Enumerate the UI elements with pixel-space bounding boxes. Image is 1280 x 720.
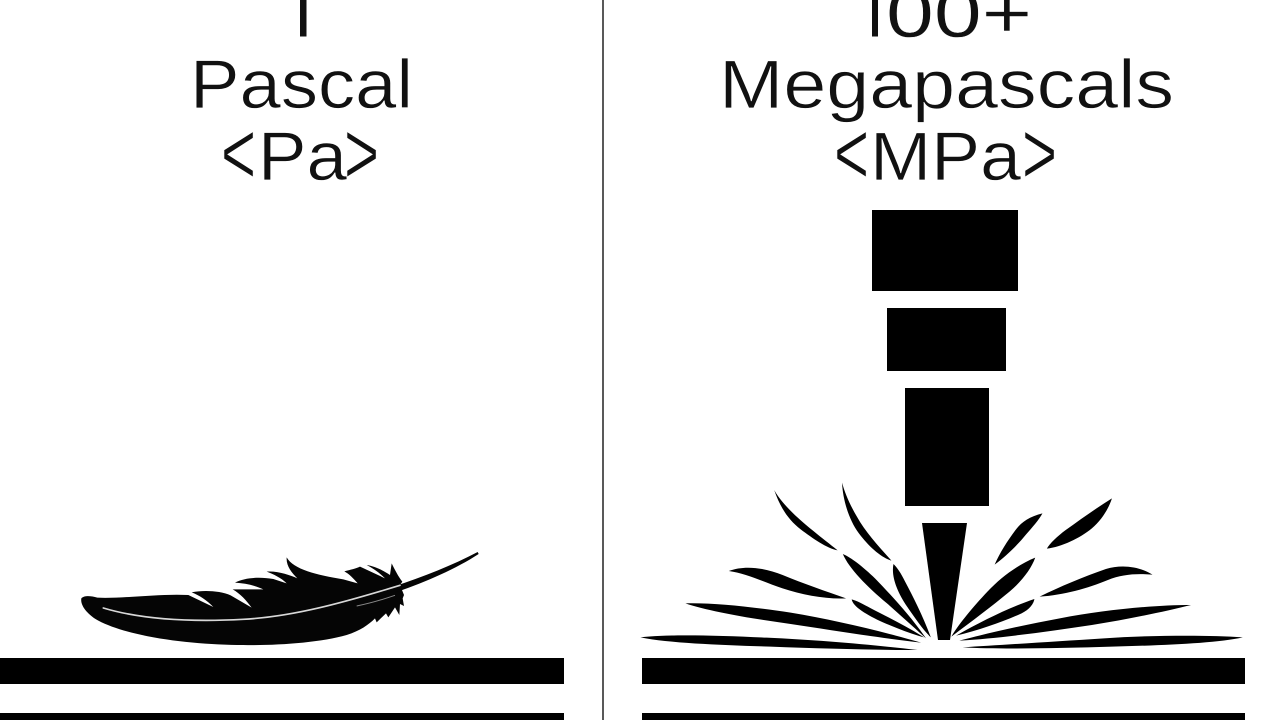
icon: impact shards	[640, 483, 1243, 650]
heading: 1 Pascal (Pa): Pa	[258, 118, 348, 195]
heading: 1 Pascal (Pa): Pascal	[190, 46, 413, 123]
heading: 1 Pascal (Pa): >	[344, 104, 379, 204]
heading: 100+ Megapascals (MPa): <	[834, 104, 869, 204]
ground bars: right	[642, 658, 1245, 720]
panel: one pascal	[0, 0, 564, 720]
icon: feather	[81, 552, 479, 645]
heading: 1 Pascal (Pa): <	[221, 104, 256, 204]
heading: 100+ Megapascals (MPa): >	[1022, 104, 1057, 204]
heading: 1 Pascal (Pa)	[190, 0, 413, 204]
ground bars: left	[0, 658, 564, 720]
heading: 100+ Megapascals (MPa): Megapascals	[719, 46, 1174, 123]
heading: 100+ Megapascals (MPa)	[719, 0, 1174, 204]
panel: hundred megapascals	[640, 0, 1245, 720]
heading: 100+ Megapascals (MPa): MPa	[870, 118, 1022, 195]
icon: press tool	[872, 210, 1018, 640]
